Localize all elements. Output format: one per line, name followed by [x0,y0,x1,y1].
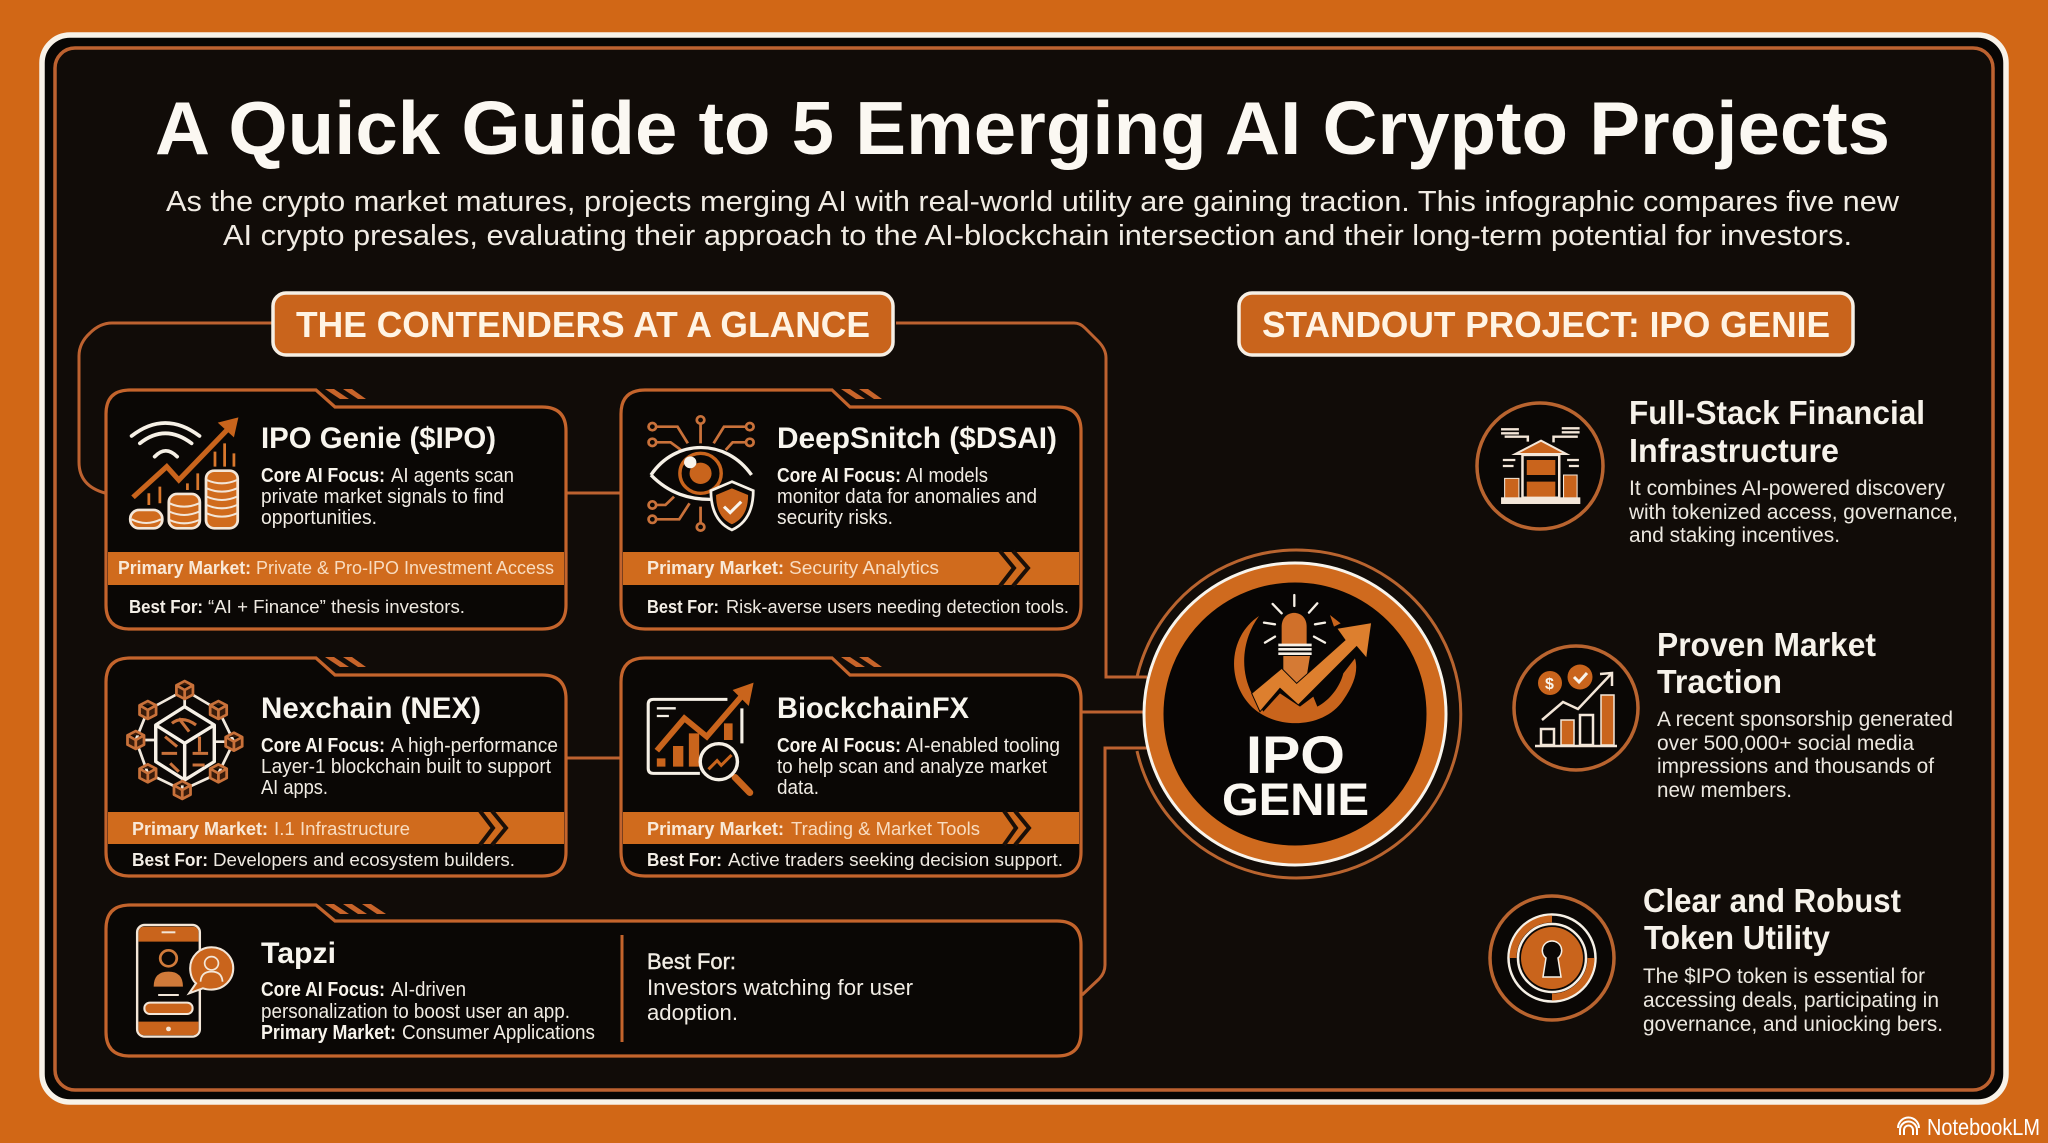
icon: coins and growth arrow [130,417,238,528]
core AI focus and primary market text: Consumer Applications [402,1022,595,1044]
icon: phone with user bubble [137,925,233,1037]
panel: BlockchainFX card [621,657,1081,876]
core AI focus text: Core AI Focus: [777,735,901,757]
emblem text GENIE: GENIE [1222,774,1369,825]
feature heading: Infrastructure [1629,432,1839,469]
feature body: The $IPO token is essential for [1643,964,1925,988]
icon: eye with shield and circuits [649,416,754,531]
best for text: Developers and ecosystem builders. [213,849,515,870]
feature body [1643,964,1943,1036]
card title: DeepSnitch ($DSAI) [777,422,1057,455]
icon: chart with pins [1514,646,1638,770]
feature heading [1643,882,1901,956]
best for text: Best For: [129,596,203,617]
chevrons [1004,811,1029,845]
core AI focus text: to help scan and analyze market [777,756,1047,778]
best for text: Best For: [647,949,736,974]
section heading: standout project [1239,293,1853,355]
primary market band text [647,819,980,839]
panel: IPO Genie card [106,389,566,629]
card divider [620,935,624,1042]
feature body [1657,707,1953,802]
primary market band text: Primary Market: [647,558,784,578]
core AI focus text: Core AI Focus: [261,465,385,487]
outer thin arc [1137,550,1461,878]
icon: token with keyhole [1490,896,1614,1020]
subtitle [166,186,1900,252]
central IPO Genie emblem [1137,550,1461,878]
panel: Tapzi card [106,904,1081,1056]
core AI focus text: private market signals to find [261,486,504,508]
primary market band text: Primary Market: [132,819,268,839]
core AI focus text: Core AI Focus: [777,465,901,487]
subtitle: AI crypto presales, evaluating their approach to the AI-blockchain intersection and their long-term potential for investors. [223,220,1852,252]
best for text: Investors watching for user [647,975,913,1000]
best for text [647,949,913,1025]
card title: Nexchain (NEX) [261,692,481,725]
icon: chart with pins: $ [1545,676,1554,693]
subtitle: As the crypto market matures, projects merging AI with real-world utility are gaining traction. This infographic compares five new [166,186,1900,218]
feature: full-stack financial infrastructure [1477,394,1958,547]
feature body: impressions and thousands of [1657,754,1934,778]
primary market band text: I.1 Infrastructure [274,819,410,839]
feature body: governance, and uniocking bers. [1643,1012,1943,1036]
core AI focus text: data. [777,777,819,799]
core AI focus text: A high-performance [391,735,558,757]
best for text: Risk-averse users needing detection tools. [726,596,1069,617]
primary market band text: Trading & Market Tools [791,819,980,839]
primary market band text: Security Analytics [789,558,939,578]
logo: bulb and arrow [1234,595,1372,723]
core AI focus text: AI agents scan [391,465,514,487]
core AI focus and primary market text: personalization to boost user an app. [261,1001,570,1023]
core AI focus text [261,465,514,529]
core AI focus and primary market text: Core AI Focus: [261,979,385,1001]
core AI focus and primary market text: Primary Market: [261,1022,396,1044]
core AI focus text: monitor data for anomalies and [777,486,1037,508]
icon: building [1477,403,1603,529]
primary market band text [647,558,939,578]
chevrons [480,811,506,845]
feature: clear and robust token utility [1490,882,1943,1036]
best for text: Best For: [647,596,719,617]
best for text: adoption. [647,1000,738,1025]
panel: DeepSnitch card [621,389,1081,629]
primary market band text [132,819,410,839]
primary market band text: Primary Market: [118,558,251,578]
feature heading: Proven Market [1657,626,1876,663]
best for text: Best For: [647,849,722,870]
core AI focus text [777,735,1060,799]
connector lines [79,323,1147,995]
feature heading: Traction [1657,663,1782,700]
feature body: with tokenized access, governance, [1628,500,1958,524]
feature heading: Token Utility [1644,919,1831,956]
core AI focus and primary market text [261,979,595,1044]
core AI focus text: Core AI Focus: [261,735,385,757]
feature heading: Clear and Robust [1643,882,1901,919]
feature heading [1657,626,1876,700]
core AI focus text: opportunities. [261,507,377,529]
feature: proven market traction [1514,626,1953,802]
feature body [1628,476,1958,547]
card title: Tapzi [261,937,336,970]
card title: IPO Genie ($IPO) [261,422,496,455]
best for text: Best For: [132,849,208,870]
panel: Nexchain card [106,657,566,876]
core AI focus text: AI models [906,465,988,487]
emblem text IPO: IPO [1246,726,1345,785]
primary market band text: Primary Market: [647,819,784,839]
feature body: It combines AI-powered discovery [1629,476,1945,500]
card title: BiockchainFX [777,692,969,725]
core AI focus text [777,465,1037,529]
icon: network of cubes [128,681,242,799]
core AI focus text: Layer-1 blockchain built to support [261,756,551,778]
feature heading: Full-Stack Financial [1629,394,1925,431]
feature body: new members. [1657,778,1792,802]
title: A Quick Guide to 5 Emerging AI Crypto Projects [155,86,1890,170]
feature body: and staking incentives. [1629,523,1840,547]
best for text: Active traders seeking decision support. [728,849,1063,870]
main ring [1154,573,1436,855]
chevrons [1000,551,1028,586]
best for text: “AI + Finance” thesis investors. [208,596,465,617]
icon: chart with magnifier [648,683,754,793]
core AI focus text: security risks. [777,507,893,529]
feature body: A recent sponsorship generated [1657,707,1953,731]
core AI focus text: AI-enabled tooling [906,735,1060,757]
white ring [1144,563,1446,865]
section heading: the contenders [273,293,893,355]
primary market band text [118,558,554,578]
feature heading [1629,394,1925,469]
core AI focus text [261,735,558,799]
feature body: accessing deals, participating in [1643,988,1939,1012]
core AI focus text: AI apps. [261,777,328,799]
section heading: standout project: STANDOUT PROJECT: IPO GENIE [1262,304,1830,345]
core AI focus and primary market text: AI-driven [391,979,466,1001]
section heading: the contenders: THE CONTENDERS AT A GLANCE [296,304,870,345]
feature body: over 500,000+ social media [1657,731,1914,755]
primary market band text: Private & Pro-IPO Investment Access [256,558,554,578]
